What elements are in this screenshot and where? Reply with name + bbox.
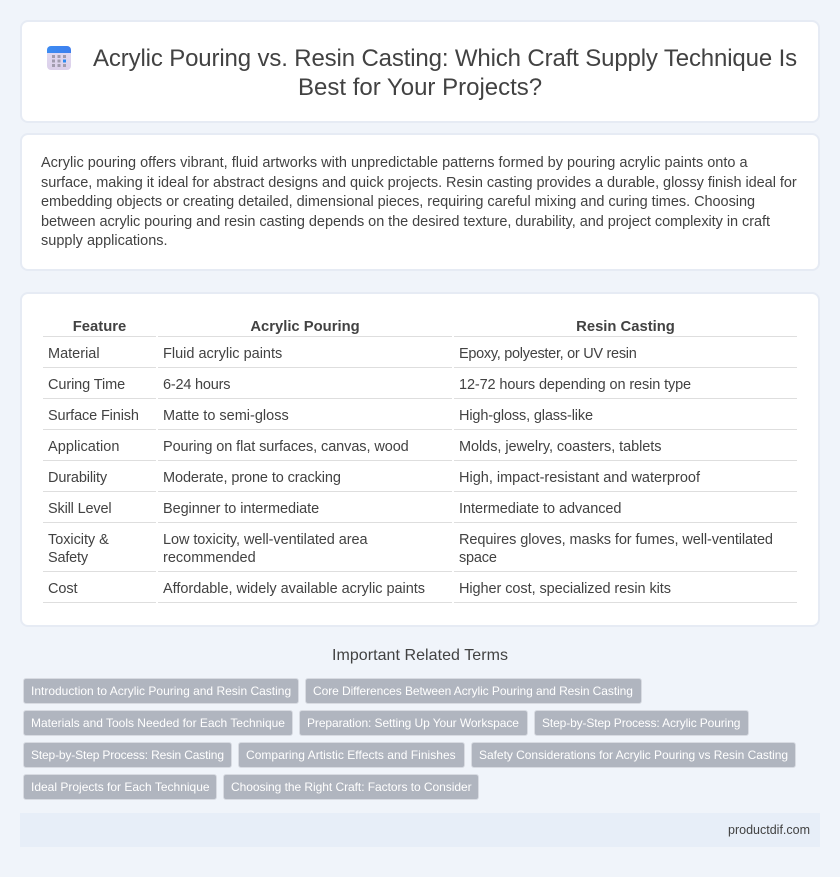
row: toxicity and safety — [48, 532, 109, 566]
comparison table: Pouring on flat surfaces, canvas, wood — [163, 439, 409, 455]
comparison table: Higher cost, specialized resin kits — [459, 581, 671, 597]
comparison table: Moderate, prone to cracking — [163, 470, 341, 486]
table header: resin casting: Resin Casting — [576, 319, 675, 335]
footer bar — [20, 813, 820, 847]
comparison table: Requires gloves, masks for fumes, well-ventilated — [459, 532, 773, 548]
comparison table: space — [459, 550, 497, 566]
intro text — [41, 155, 797, 249]
row: application: Application — [48, 439, 120, 455]
comparison table: High, impact-resistant and waterproof — [459, 470, 700, 486]
comparison table: Molds, jewelry, coasters, tablets — [459, 439, 661, 455]
comparison table: 6-24 hours — [163, 377, 230, 393]
related terms chips: Ideal Projects for Each Technique — [31, 780, 210, 794]
table header: feature: Feature — [73, 319, 126, 335]
intro text: Acrylic pouring offers vibrant, fluid artworks with unpredictable patterns formed by pouring acrylic paints onto a — [41, 155, 748, 171]
comparison table: Fluid acrylic paints — [163, 346, 282, 362]
comparison table: Affordable, widely available acrylic paints — [163, 581, 425, 597]
comparison table: Low toxicity, well-ventilated area — [163, 532, 367, 548]
related terms chips: Choosing the Right Craft: Factors to Consider — [231, 780, 472, 794]
comparison table — [43, 319, 797, 603]
related terms chips: Safety Considerations for Acrylic Pouring vs Resin Casting — [479, 748, 788, 762]
row: toxicity and safety: Safety — [48, 550, 88, 566]
comparison table: Epoxy, polyester, or UV resin — [459, 346, 636, 362]
related terms chips: Preparation: Setting Up Your Workspace — [307, 716, 519, 730]
row: surface finish: Surface Finish — [48, 408, 139, 424]
table header: acrylic pouring: Acrylic Pouring — [250, 319, 360, 335]
comparison table: Intermediate to advanced — [459, 501, 621, 517]
row: toxicity and safety: Toxicity & — [48, 532, 109, 548]
header card — [20, 20, 820, 123]
comparison table: Matte to semi-gloss — [163, 408, 289, 424]
related terms chips: Step-by-Step Process: Resin Casting — [31, 748, 224, 762]
icon: calendar — [47, 46, 71, 70]
title — [93, 45, 797, 101]
table card — [20, 292, 820, 627]
related terms chips: Comparing Artistic Effects and Finishes — [246, 748, 456, 762]
related terms chips: Core Differences Between Acrylic Pouring and Resin Casting — [313, 684, 633, 698]
comparison table: Beginner to intermediate — [163, 501, 319, 517]
row: material: Material — [48, 346, 100, 362]
comparison table: 12-72 hours depending on resin type — [459, 377, 691, 393]
footer source: productdif.com — [728, 823, 810, 837]
related terms chips: Materials and Tools Needed for Each Technique — [31, 716, 285, 730]
related terms chips — [23, 678, 796, 800]
related terms heading: Important Related Terms — [332, 647, 508, 664]
comparison table: High-gloss, glass-like — [459, 408, 593, 424]
row: durability: Durability — [48, 470, 107, 486]
title: Best for Your Projects? — [298, 74, 542, 101]
related terms chips: Step-by-Step Process: Acrylic Pouring — [542, 716, 740, 730]
intro text: surface, making it ideal for abstract designs and quick projects. Resin casting provides a durable, glossy finish ideal for — [41, 174, 797, 190]
title: Acrylic Pouring vs. Resin Casting: Which Craft Supply Technique Is — [93, 45, 797, 72]
comparison table: recommended — [163, 550, 256, 566]
related terms chips: Introduction to Acrylic Pouring and Resin Casting — [31, 684, 291, 698]
row: cost: Cost — [48, 581, 77, 597]
intro card — [20, 133, 820, 271]
row: skill level: Skill Level — [48, 501, 111, 517]
intro text: supply applications. — [41, 233, 168, 249]
row: curing time: Curing Time — [48, 377, 125, 393]
intro text: embedding objects or creating detailed, dimensional pieces, requiring careful mixing and curing times. Choosing — [41, 194, 755, 210]
intro text: between acrylic pouring and resin casting depends on the desired texture, durability, and project complexity in craft — [41, 214, 770, 230]
